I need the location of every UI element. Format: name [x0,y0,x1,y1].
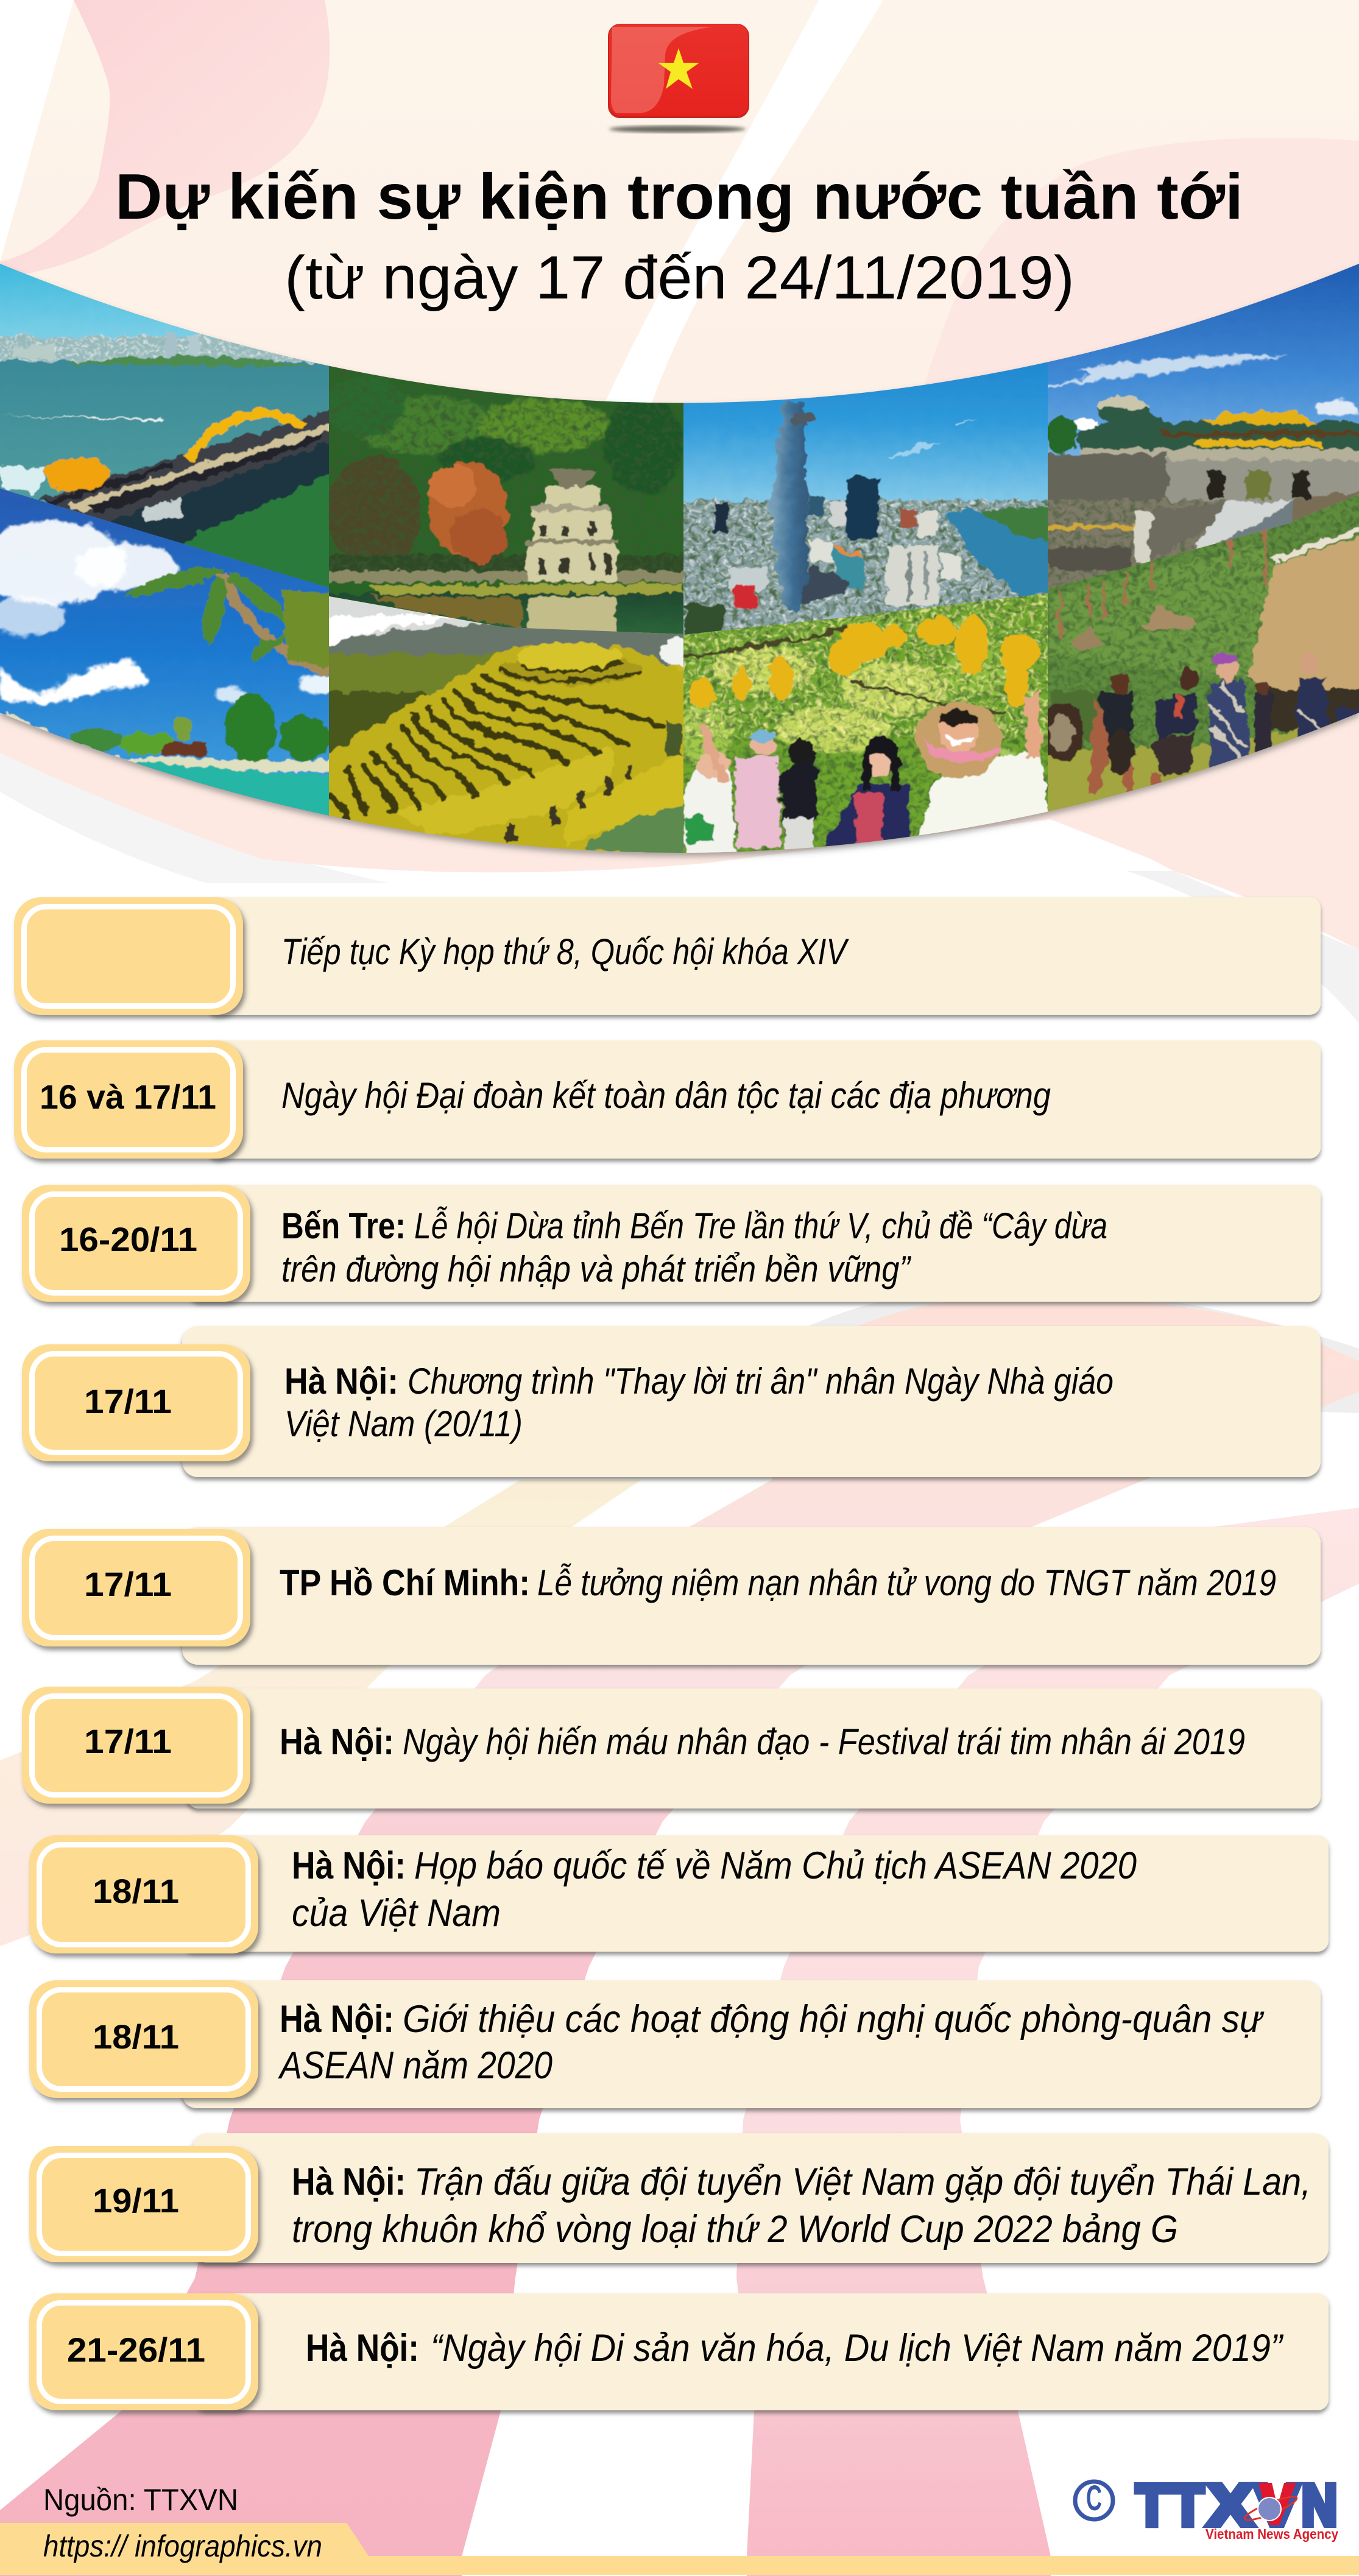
website: https:// infographics.vn [43,2529,322,2563]
date badge [29,1835,258,1953]
date badge [29,1980,258,2098]
logo letters: T [1136,2473,1168,2538]
event text: Lễ hội Dừa tỉnh Bến Tre lần thứ V, chủ đề “Cây dừa [414,1205,1107,1246]
event row 7 [29,1835,1329,1953]
logo letters: X [1208,2473,1253,2538]
date badge: 18/11 [93,1872,179,1910]
photo: dragon bridge [0,264,329,588]
event text: “Ngày hội Di sản văn hóa, Du lịch Việt Nam năm 2019” [431,2327,1284,2370]
logo letters: T [1172,2473,1204,2538]
date badge [22,1529,250,1646]
date badge [22,1687,250,1804]
photo: blossom tree and women [672,585,1059,867]
event text: Hà Nội: [280,1721,394,1762]
photo: Hue citadel [1042,244,1359,607]
date badge [29,2146,258,2262]
photo: Ho Chi Minh City skyline [672,296,1059,644]
event text [277,1998,1265,2087]
date badge [22,1344,250,1461]
event text [292,1844,1137,1935]
event text: Ngày hội Đại đoàn kết toàn dân tộc tại các địa phương [281,1075,1051,1116]
event row 3 [22,1185,1321,1302]
photo: Hoan Kiem lake tower [329,365,683,634]
event text: Hà Nội: [292,2161,406,2203]
event text: Giới thiệu các hoạt động hội nghị quốc phòng-quân sự [403,1998,1265,2041]
event text: trên đường hội nhập và phát triển bền vững” [281,1249,912,1290]
panel [182,1326,1321,1477]
title: Dự kiến sự kiện trong nước tuần tới [115,161,1243,233]
logo letters [1136,2473,1337,2538]
event text [284,1361,1114,1444]
red V and globe [1243,2483,1299,2525]
date badge [29,2293,258,2410]
background: pale curved band [0,1480,641,1946]
date badge: 19/11 [93,2181,179,2220]
panel [192,2133,1329,2263]
panel [183,1835,1329,1952]
event row 6 [22,1687,1321,1808]
date badge [22,1185,250,1302]
background: soft strips below the photo band [0,707,1359,1413]
date badge (empty) [14,897,243,1015]
date badge: 16 và 17/11 [40,1078,216,1116]
logo letters: N [1302,2473,1337,2538]
background: pink curved band left [0,1294,1359,2576]
event text: Hà Nội: [292,1844,406,1887]
photo collage band [0,244,1359,867]
event text: Hà Nội: [280,1998,394,2041]
star [658,48,699,89]
background: top cream with pink shapes [0,0,1359,439]
event text [280,1562,1276,1603]
flag of Vietnam [608,24,749,133]
subtitle: (từ ngày 17 đến 24/11/2019) [284,244,1075,312]
photo: rice terraces [322,590,692,865]
logo letters: V [1255,2473,1299,2538]
TTXVN logo [1075,2473,1338,2542]
date badge [14,1040,243,1159]
photo: highland gong dancers [1039,479,1359,853]
event row 8 [29,1980,1321,2108]
footer ribbon [0,2523,1359,2575]
event text: Ngày hội hiến máu nhân đạo - Festival trái tim nhân ái 2019 [403,1721,1245,1762]
panel [207,897,1321,1015]
background: pink curved band right [736,1508,1359,2576]
event text [292,2161,1311,2251]
event text: Hà Nội: [306,2327,419,2370]
agency name: Vietnam News Agency [1205,2526,1338,2542]
event text: ASEAN năm 2020 [277,2044,552,2087]
event text: Tiếp tục Kỳ họp thứ 8, Quốc hội khóa XIV [281,931,849,972]
panel [207,1040,1321,1159]
event row 2 [14,1040,1321,1159]
photo: beach with palm [0,489,333,822]
copyright mark [1075,2479,1113,2519]
panel [186,1689,1321,1808]
event text: Bến Tre: [281,1205,406,1246]
event text: Chương trình "Thay lời tri ân" nhân Ngày Nhà giáo [408,1361,1114,1402]
event text: của Việt Nam [292,1892,501,1935]
panel [182,1527,1321,1665]
event text: trong khuôn khổ vòng loại thứ 2 World Cup 2022 bảng G [292,2208,1178,2251]
event row 10 [29,2293,1329,2410]
event text [281,1205,1107,1290]
event text: Việt Nam (20/11) [284,1403,523,1444]
panel [182,1980,1321,2108]
date badge: 17/11 [84,1565,172,1603]
panel [189,1185,1321,1302]
date badge: 17/11 [84,1722,172,1760]
date badge: 18/11 [93,2017,179,2056]
date badge: 21-26/11 [67,2331,205,2369]
event row 9 [29,2133,1329,2263]
event text: Hà Nội: [284,1361,398,1402]
date badge: 16-20/11 [59,1220,197,1258]
date badge: 17/11 [84,1382,172,1420]
event row 5 [22,1527,1321,1665]
panel [195,2293,1329,2410]
copyright mark: C [1086,2479,1102,2518]
event row 4 [22,1326,1321,1477]
event row 1 [14,897,1321,1015]
source: Nguồn: TTXVN [43,2483,238,2517]
event text: Họp báo quốc tế về Năm Chủ tịch ASEAN 2020 [414,1844,1137,1887]
event text: TP Hồ Chí Minh: [280,1562,530,1603]
